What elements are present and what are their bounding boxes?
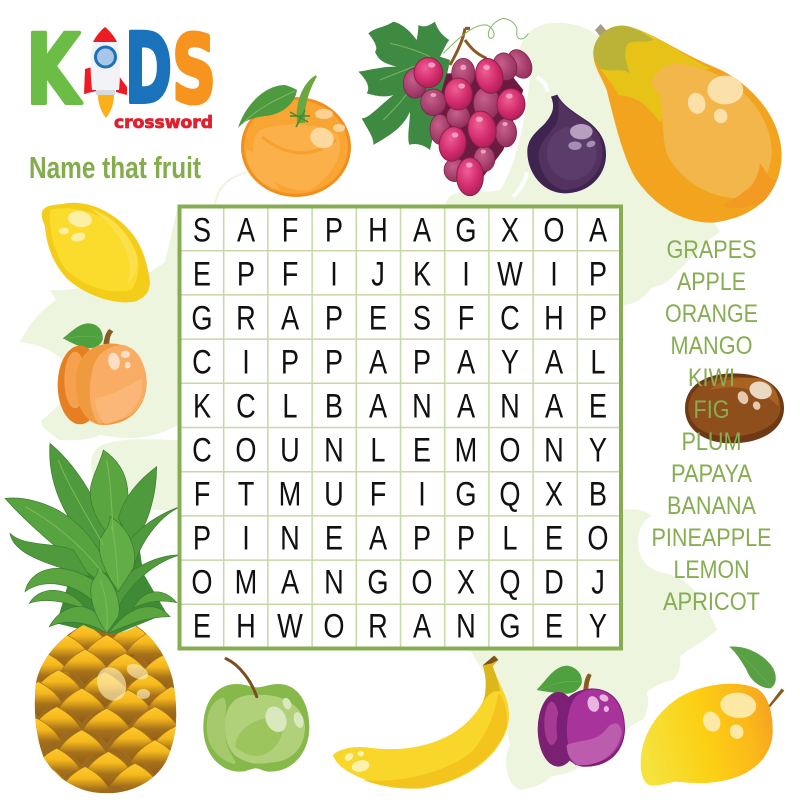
grid row 9: X xyxy=(457,563,475,601)
grid row 7: M xyxy=(279,475,301,513)
grid row 1: A xyxy=(237,211,256,249)
grid row 9: G xyxy=(367,563,389,601)
grid row 3: E xyxy=(369,299,387,337)
grid row 6: E xyxy=(413,431,431,469)
grid row 3: F xyxy=(458,299,474,337)
grid row 2: F xyxy=(282,255,298,293)
grid row 1: A xyxy=(589,211,608,249)
grid row 2: J xyxy=(371,255,385,293)
word list: GRAPES xyxy=(666,236,756,264)
grid row 9: J xyxy=(591,563,605,601)
word list: KIWI xyxy=(688,364,735,392)
heading: Name that fruit: Name that fruit xyxy=(29,150,201,185)
grid row 4: A xyxy=(369,343,388,381)
grid row 4: L xyxy=(590,343,606,381)
grid row 9 xyxy=(191,563,605,601)
grid row 6: O xyxy=(235,431,257,469)
grid row 8: P xyxy=(457,519,475,557)
grid row 3: P xyxy=(325,299,343,337)
grid row 9: D xyxy=(544,563,564,601)
grid row 3: H xyxy=(544,299,564,337)
grid row 5: N xyxy=(500,387,520,425)
grid row 4: C xyxy=(192,343,212,381)
word list: APRICOT xyxy=(663,588,760,616)
grid row 1: A xyxy=(413,211,432,249)
icon: papaya xyxy=(593,24,782,223)
grid row 6: N xyxy=(324,431,344,469)
word list: MANGO xyxy=(670,332,752,360)
grid row 10: E xyxy=(545,607,563,645)
grid row 10: R xyxy=(368,607,388,645)
grid row 8: A xyxy=(369,519,388,557)
grid row 8: E xyxy=(325,519,343,557)
icon: rocket xyxy=(84,27,127,118)
grid row 3: S xyxy=(413,299,431,337)
grid row 2: I xyxy=(330,255,338,293)
grid row 2: P xyxy=(589,255,607,293)
grid row 9: O xyxy=(411,563,433,601)
icon: apple xyxy=(203,659,309,772)
word list: FIG xyxy=(694,396,730,424)
grid row 6: N xyxy=(544,431,564,469)
icon: orange xyxy=(238,76,351,197)
grid row 8: O xyxy=(587,519,609,557)
grid row 9: N xyxy=(324,563,344,601)
grid row 4: I xyxy=(242,343,250,381)
grid row 5: N xyxy=(412,387,432,425)
grid row 8: I xyxy=(242,519,250,557)
grid background and lines xyxy=(179,206,621,649)
grid row 5: A xyxy=(369,387,388,425)
grid row 8: P xyxy=(413,519,431,557)
grid row 7: Q xyxy=(499,475,521,513)
vein outline near orange xyxy=(215,172,247,205)
grid row 7: F xyxy=(370,475,386,513)
grid row 10: G xyxy=(499,607,521,645)
grid row 1: G xyxy=(455,211,477,249)
grid row 1: S xyxy=(193,211,211,249)
icon: kiwi xyxy=(685,373,784,443)
grid row 8 xyxy=(193,519,609,557)
grid row 10: N xyxy=(456,607,476,645)
grid row 3: P xyxy=(589,299,607,337)
grid row 5: L xyxy=(282,387,298,425)
grid row 2: I xyxy=(462,255,470,293)
grid row 7: B xyxy=(589,475,607,513)
grid row 3 xyxy=(191,299,607,337)
icon: mango xyxy=(641,646,784,786)
logo letter K: K xyxy=(26,14,83,126)
grid row 7: G xyxy=(455,475,477,513)
grid row 7: T xyxy=(238,475,255,513)
word search grid xyxy=(179,206,621,649)
logo letter D: D xyxy=(125,13,172,125)
grid row 1: X xyxy=(501,211,519,249)
icon: pineapple xyxy=(4,442,178,794)
word list: BANANA xyxy=(667,492,756,520)
grid row 5: B xyxy=(325,387,343,425)
grid row 5: C xyxy=(236,387,256,425)
grid row 6: Y xyxy=(589,431,607,469)
grid row 7 xyxy=(194,475,607,513)
grid row 6: L xyxy=(370,431,386,469)
grid row 10: O xyxy=(323,607,345,645)
grid row 10: A xyxy=(413,607,432,645)
grid row 9: M xyxy=(235,563,257,601)
grid row 10 xyxy=(193,607,607,645)
grid row 7: U xyxy=(324,475,344,513)
grid row 4: P xyxy=(281,343,299,381)
grid row 5: K xyxy=(193,387,212,425)
grid row 3: G xyxy=(191,299,213,337)
grid row 6: U xyxy=(280,431,300,469)
grid row 2: I xyxy=(550,255,558,293)
grid row 1: H xyxy=(368,211,388,249)
grid row 9: O xyxy=(191,563,213,601)
grid row 3: C xyxy=(500,299,520,337)
word list: LEMON xyxy=(674,556,750,584)
pineapple body xyxy=(34,625,176,794)
word list: PLUM xyxy=(682,428,742,456)
word list: ORANGE xyxy=(665,300,758,328)
grid row 10: W xyxy=(277,607,303,645)
icon: grapes xyxy=(358,18,537,196)
grid row 4 xyxy=(192,343,606,381)
icon: lemon xyxy=(42,203,150,302)
word list xyxy=(652,236,772,616)
grid row 7: F xyxy=(194,475,210,513)
grid row 6 xyxy=(192,431,607,469)
grid row 2: W xyxy=(497,255,523,293)
icon: plum xyxy=(537,666,625,767)
grid row 8: L xyxy=(502,519,518,557)
pineapple crown leaves xyxy=(5,443,180,637)
grid row 3: A xyxy=(281,299,300,337)
grid row 1: F xyxy=(282,211,298,249)
grid row 9: A xyxy=(281,563,300,601)
grid row 6: O xyxy=(499,431,521,469)
grid row 9: Q xyxy=(499,563,521,601)
grid row 10: H xyxy=(236,607,256,645)
grid row 2 xyxy=(193,255,607,293)
grid row 4: P xyxy=(325,343,343,381)
grid row 7: I xyxy=(418,475,426,513)
grid row 10: Y xyxy=(589,607,607,645)
grid row 4: Y xyxy=(501,343,519,381)
word list: PAPAYA xyxy=(671,460,752,488)
grid row 4: A xyxy=(545,343,564,381)
icon: banana xyxy=(333,656,509,789)
logo: Kids crossword xyxy=(26,13,216,133)
grid row 6: M xyxy=(455,431,477,469)
grid row 5 xyxy=(193,387,607,425)
grid row 2: E xyxy=(193,255,211,293)
icon: fig xyxy=(527,95,606,193)
grid row 10: E xyxy=(193,607,211,645)
grid row 6: C xyxy=(192,431,212,469)
grid row 2: P xyxy=(237,255,255,293)
logo subtitle: crossword xyxy=(114,113,213,133)
grid row 1 xyxy=(193,211,608,249)
grid row 5: E xyxy=(589,387,607,425)
grid row 8: P xyxy=(193,519,211,557)
grid row 4: P xyxy=(413,343,431,381)
grid row 8: N xyxy=(280,519,300,557)
grape leaf xyxy=(358,22,450,150)
grid row 7: X xyxy=(545,475,563,513)
grid row 4: A xyxy=(457,343,476,381)
grid row 8: E xyxy=(545,519,563,557)
word list: PINEAPPLE xyxy=(652,524,772,552)
grid row 1: O xyxy=(543,211,565,249)
grid row 2: K xyxy=(413,255,432,293)
word list: APPLE xyxy=(677,268,746,296)
icon: apricot xyxy=(58,323,147,425)
grid row 5: A xyxy=(457,387,476,425)
logo letter S: S xyxy=(172,16,216,125)
grid row 3: R xyxy=(236,299,256,337)
grid row 5: A xyxy=(545,387,564,425)
grid row 1: P xyxy=(325,211,343,249)
